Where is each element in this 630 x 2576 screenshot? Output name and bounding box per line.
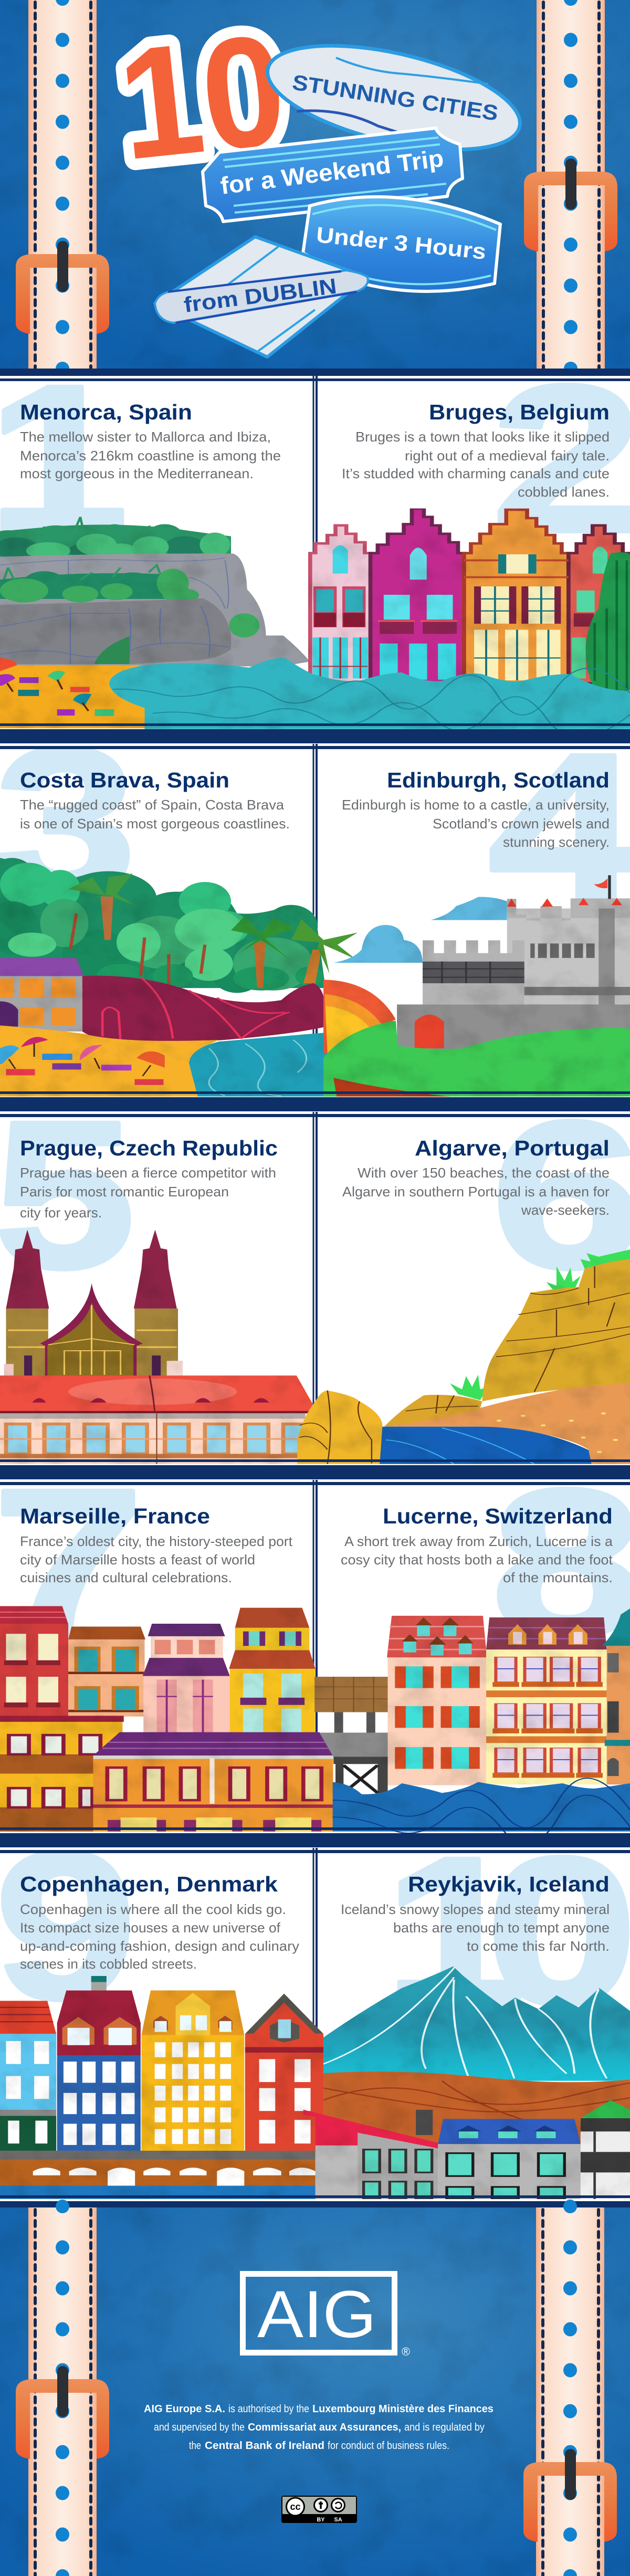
text: Lucerne: of the mountains. [503,1570,613,1585]
text: Algarve: Algarve, Portugal [415,1136,610,1160]
Marseille orange house [68,1626,145,1717]
small rock [385,1395,482,1426]
Marseille lower yellow building [0,1716,124,1832]
text: Costa Brava: is one of Spain’s most gorgeous coastlines. [20,816,290,832]
text: Marseille: France’s oldest city, the history-steeped port [20,1533,293,1549]
text: Lucerne: A short trek away from Zurich, Lucerne is a [344,1533,613,1549]
text: Marseille [20,1504,293,1585]
forest [0,858,326,993]
text: Bruges: cobbled lanes. [518,484,610,500]
text: Costa Brava: Costa Brava, Spain [20,768,229,792]
text: Algarve [342,1136,610,1218]
band between rows 1 and 2 [0,723,630,749]
right belt (hero) [524,0,617,375]
Marseille yellow house [229,1608,316,1734]
text: Prague [20,1136,278,1221]
Creative Commons badge: cc [290,2501,301,2512]
band between rows 3 and 4 [0,1459,630,1485]
title sticker: from dublin: from DUBLIN [182,274,338,317]
Copenhagen house 3 [141,1991,244,2151]
top bushes [0,517,231,560]
row 5: Copenhagen and Reykjavik [0,1808,630,2201]
footer background [0,2207,630,2576]
text: Copenhagen: up-and-coming fashion, design and culinary [20,1938,299,1954]
text: Algarve: Algarve in southern Portugal is a haven for [342,1184,610,1200]
big number 8: 8 [491,1445,630,1680]
legal text: is authorised by the [228,2403,309,2415]
row 3: Prague and Algarve [0,1077,630,1465]
big number 10: 0 [486,1813,630,2048]
text: Bruges: right out of a medieval fairy tale. [405,448,610,464]
cliff [482,1259,630,1401]
title: number 10: 10 [111,1,293,193]
row 1: Menorca and Bruges [0,376,630,729]
tufts of grass [450,1249,630,1400]
small bushes [94,613,259,664]
text: Edinburgh: Scotland’s crown jewels and [433,816,610,832]
text: Edinburgh: Edinburgh is home to a castle, a university, [342,797,610,813]
text: Edinburgh: Edinburgh, Scotland [387,768,610,792]
big number 10: 1 [384,1813,526,2048]
big number 6: 6 [491,1077,630,1312]
mountains [323,1966,630,2081]
Copenhagen house 2 [57,1976,141,2151]
Creative Commons badge: SA [334,2517,342,2523]
AIG logo: ® [402,2345,410,2358]
text: Lucerne [341,1504,613,1585]
water [109,658,630,737]
band between rows 4 and 5 [0,1827,630,1853]
band: last row bottom edge [0,2195,630,2207]
legal text: for conduct of business rules. [328,2440,449,2452]
title sticker: under 3 hours: Under 3 Hours [315,222,487,264]
text: Copenhagen: Copenhagen is where all the cool kids go. [20,1901,286,1917]
upper rock [0,553,310,666]
building [0,958,83,1032]
text: Menorca [20,400,281,481]
text: Bruges: It’s studded with charming canals and cute [342,466,610,481]
text: Reykjavik [341,1872,610,1954]
text: Bruges: Bruges, Belgium [429,400,610,424]
legal text: Commissariat aux Assurances, [248,2422,401,2433]
text: Algarve: wave-seekers. [521,1202,610,1218]
title sticker: for a weekend trip: for a Weekend Trip [219,144,445,199]
water [377,1427,592,1464]
rainbow [323,980,396,1053]
text: Marseille: cuisines and cultural celebrations. [20,1570,232,1585]
legal text: AIG Europe S.A. [144,2403,225,2415]
illustration: Marseille and Lucerne [0,1606,630,1845]
palms [68,874,358,988]
illustration: Prague and Algarve [0,1229,630,1464]
boulder [297,1391,383,1464]
right belt (footer) [523,2200,617,2576]
title sticker: from dublin [155,237,368,357]
text: Menorca: most gorgeous in the Mediterranean. [20,466,254,481]
text: Menorca: Menorca’s 216km coastline is among the [20,448,281,464]
illustration: Menorca and Bruges [0,509,630,737]
text: Copenhagen: Copenhagen, Denmark [20,1872,278,1896]
text: Reykjavik: Reykjavik, Iceland [408,1872,610,1896]
illustration: Costa Brava and Edinburgh [0,858,630,1097]
big number 10 [384,1813,630,2048]
sand [384,1383,630,1464]
text: Lucerne: cosy city that hosts both a lake and the foot [341,1552,613,1568]
band: hero bottom edge [0,369,630,381]
row 4: Marseille and Lucerne [0,1445,630,1845]
text: Costa Brava [20,768,290,832]
Reykjavik grey building [303,2110,439,2199]
grass [323,1021,630,1097]
illustration: Copenhagen and Reykjavik [0,1966,630,2199]
legal text [144,2403,494,2452]
water [189,1033,337,1097]
Copenhagen house 4 [245,1994,323,2151]
text: Marseille: city of Marseille hosts a feast of world [20,1552,255,1568]
text: Copenhagen: Its compact size houses a new universe of [20,1920,281,1936]
text: Prague: city for years. [20,1205,102,1221]
title sticker: for a weekend trip [203,128,463,222]
title sticker: stunning cities [258,26,530,170]
text: Costa Brava: The “rugged coast” of Spain, Costa Brava [20,797,285,813]
water [333,1778,630,1845]
clouds [333,897,507,963]
covered bridge [314,1677,392,1794]
left belt (hero) [16,0,109,375]
beach [0,665,145,728]
Lucerne house 1 [387,1616,487,1785]
red rock [82,976,327,1044]
second bushes [0,565,199,603]
text: Bruges [342,400,610,500]
band between rows 2 and 3 [0,1091,630,1117]
AIG logo: AIG [257,2277,376,2351]
text: Copenhagen: scenes in its cobbled streets. [20,1956,197,1972]
legal text: Luxembourg Ministère des Finances [312,2403,494,2415]
beach [0,1025,219,1097]
big number 2: 2 [491,341,630,576]
Lucerne house 2 [486,1617,607,1784]
row 2: Costa Brava and Edinburgh [0,704,630,1097]
Marseille red house [0,1606,68,1718]
legal text: Central Bank of Ireland [205,2440,324,2452]
AIG logo [243,2274,410,2358]
cathedral [6,1229,178,1379]
tree [586,552,630,696]
text: Prague: Paris for most romantic European [20,1184,229,1200]
legal text: the [189,2440,201,2452]
text: Edinburgh: stunning scenery. [503,834,610,850]
text: Prague: Prague, Czech Republic [20,1136,278,1160]
legal text: and is regulated by [404,2422,485,2433]
text: Lucerne: Lucerne, Switzerland [383,1504,613,1528]
legal text: and supervised by the [154,2422,245,2433]
text: Copenhagen [20,1872,299,1972]
Creative Commons badge [281,2496,357,2523]
Reykjavik blue roof building [438,2119,581,2199]
Copenhagen quay [0,2151,316,2199]
hero background [0,0,630,369]
Copenhagen house 1 [0,2001,56,2151]
umbrellas [0,1037,165,1085]
text: Edinburgh [342,768,610,850]
umbrellas and towels [0,658,114,716]
text: Bruges: Bruges is a town that looks like it slipped [355,429,610,445]
text: Algarve: With over 150 beaches, the coast of the [358,1165,610,1181]
title sticker: under 3 hours [303,197,500,291]
text: Menorca: Menorca, Spain [20,400,192,424]
big number 4: 4 [488,710,630,944]
text: Menorca: The mellow sister to Mallorca and Ibiza, [20,429,271,445]
Marseille front building [93,1732,333,1832]
Bruges houses [310,509,630,684]
Reykjavik right building [581,2100,630,2199]
left belt (footer) [16,2200,109,2576]
castle [397,875,630,1050]
red roof building [0,1361,312,1464]
text: Reykjavik: baths are enough to tempt anyone [393,1920,610,1936]
Bruges windows [312,545,607,680]
Creative Commons badge: BY [317,2517,325,2523]
text: Prague: Prague has been a fierce competitor with [20,1165,276,1181]
title sticker: stunning cities: STUNNING CITIES [291,70,500,125]
text: Marseille: Marseille, France [20,1504,210,1528]
red land [323,2072,630,2148]
text: Reykjavik: to come this far North. [467,1938,610,1954]
Lucerne house 3 [602,1608,630,1784]
lower rock [0,598,231,664]
text: Reykjavik: Iceland’s snowy slopes and steamy mineral [341,1901,610,1917]
Marseille pink house [143,1624,230,1734]
